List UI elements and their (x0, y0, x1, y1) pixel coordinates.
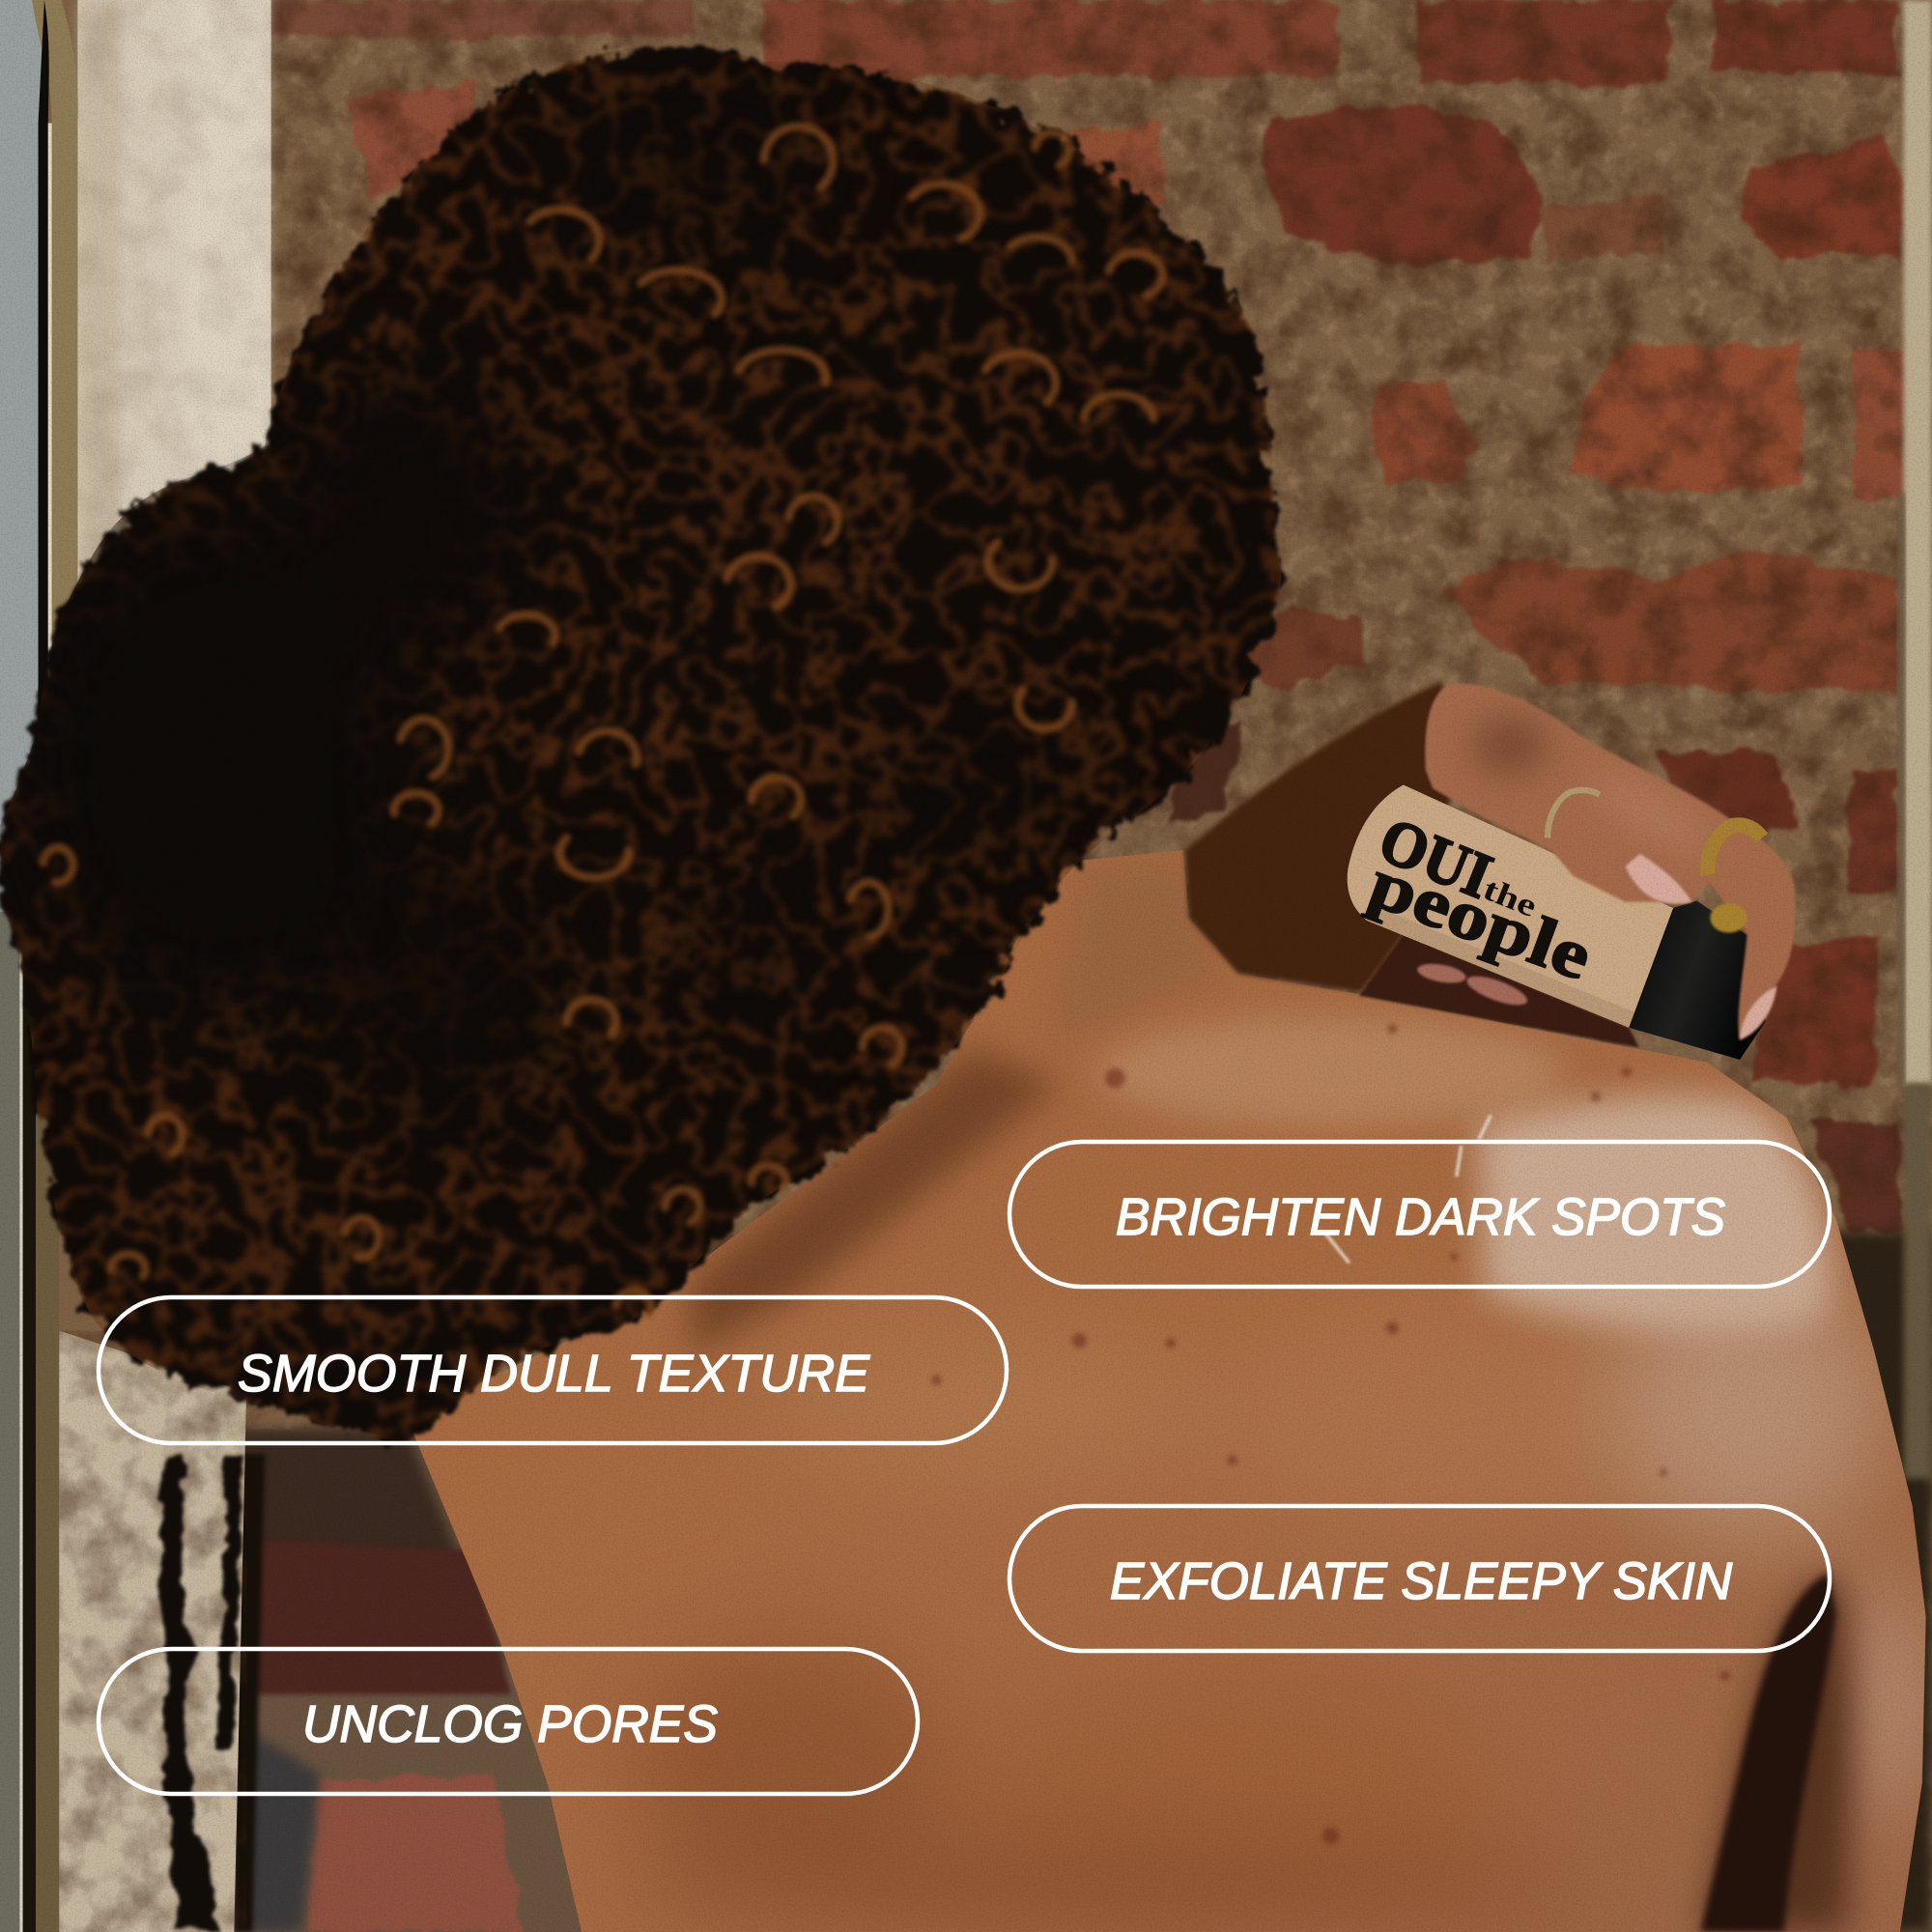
label: unclog pores: UNCLOG PORES (302, 1695, 718, 1753)
lower left brick wall (234, 1430, 591, 1932)
fingers behind bottle (1416, 960, 1530, 1010)
bottle (1348, 784, 1766, 1060)
pill: exfoliate sleepy skin (1009, 1506, 1830, 1651)
hand holding bottle (1425, 684, 1796, 1040)
ring: thin gem band (1548, 790, 1600, 838)
bottle logo text: OUI (1370, 805, 1501, 912)
bottle logo text (1360, 805, 1602, 995)
pill: unclog pores (99, 1649, 918, 1794)
nail: thumb (1740, 985, 1776, 1040)
label: brighten dark spots: BRIGHTEN DARK SPOTS (1116, 1188, 1725, 1246)
ring: gold twist (1707, 825, 1762, 875)
hair (0, 25, 1306, 1454)
hair curls (43, 127, 1163, 1314)
label: smooth dull texture: SMOOTH DULL TEXTURE (238, 1345, 870, 1403)
nail: index finger (1625, 854, 1691, 904)
bottle logo text: the (1478, 871, 1542, 924)
pill: smooth dull texture (99, 1297, 1007, 1443)
back and shoulder (407, 850, 1932, 1932)
label: exfoliate sleepy skin: EXFOLIATE SLEEPY SKIN (1110, 1552, 1733, 1610)
pill: brighten dark spots (1009, 1142, 1830, 1287)
gold cap detail (1710, 903, 1747, 933)
mirror and gold frame (0, 0, 78, 1932)
white painted column (57, 0, 271, 1932)
dark gap under bottle (1359, 934, 1638, 1047)
bottle logo text: people (1360, 844, 1602, 995)
armpit shadow (1700, 1573, 1836, 1932)
forearm in shadow (1185, 681, 1454, 992)
